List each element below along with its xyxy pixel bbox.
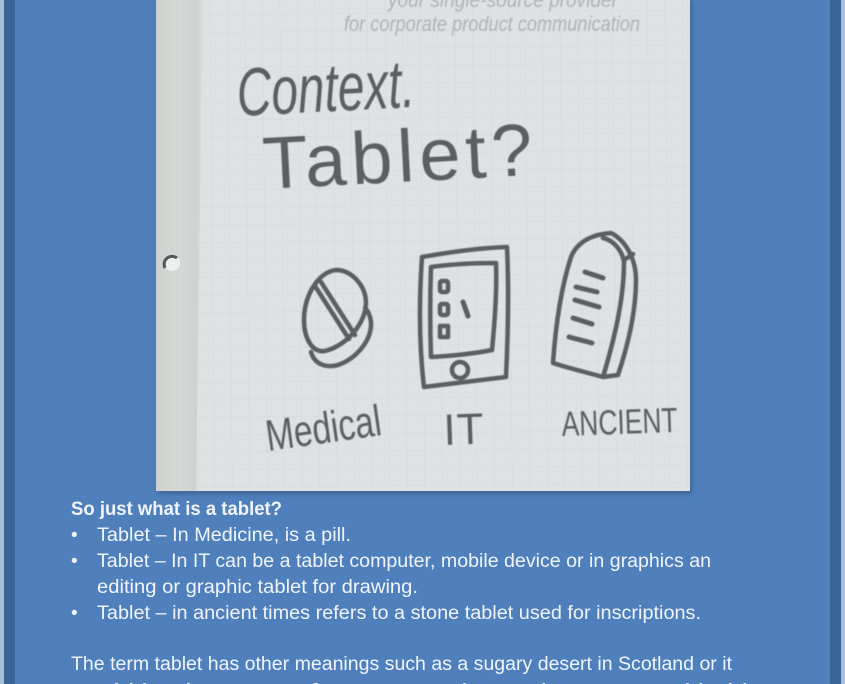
bullet: medicine: Tablet – In Medicine, is a pill. (97, 525, 351, 546)
handwritten heading: Context. (235, 46, 417, 131)
handwritten labels: IT (443, 405, 484, 455)
bullet: ancient: • (71, 603, 78, 624)
bullet: medicine: • (71, 525, 78, 546)
bullet: IT: • (71, 551, 78, 572)
punched hole (164, 255, 180, 271)
bullet: IT: editing or graphic tablet for drawing. (97, 577, 418, 598)
printed notepad tagline: for corporate product communication (344, 13, 640, 36)
handwritten labels (263, 396, 678, 461)
handwritten labels: Medical (263, 396, 384, 461)
bullet: ancient: Tablet – in ancient times refers to a stone tablet used for inscriptions. (97, 603, 701, 624)
paragraph: other meanings (71, 654, 761, 684)
bullet: IT (71, 551, 711, 598)
handwritten heading (235, 46, 534, 205)
handwritten labels: ANCIENT (561, 401, 678, 444)
icon: medical pill (304, 270, 371, 366)
handwritten heading: Tablet? (260, 108, 534, 205)
printed notepad tagline (344, 0, 640, 36)
heading: So just what is a tablet? (71, 499, 282, 520)
text block: what is a tablet (71, 499, 761, 684)
icon: ancient stone tablet (553, 233, 636, 377)
paragraph: other meanings: The term tablet has other meanings such as a sugary desert in Scotland or it (71, 654, 733, 675)
bullet: IT: Tablet – In IT can be a tablet computer, mobile device or in graphics an (97, 551, 711, 572)
photo: notepad sketch (156, 0, 692, 494)
icon: IT tablet computer (420, 247, 508, 387)
